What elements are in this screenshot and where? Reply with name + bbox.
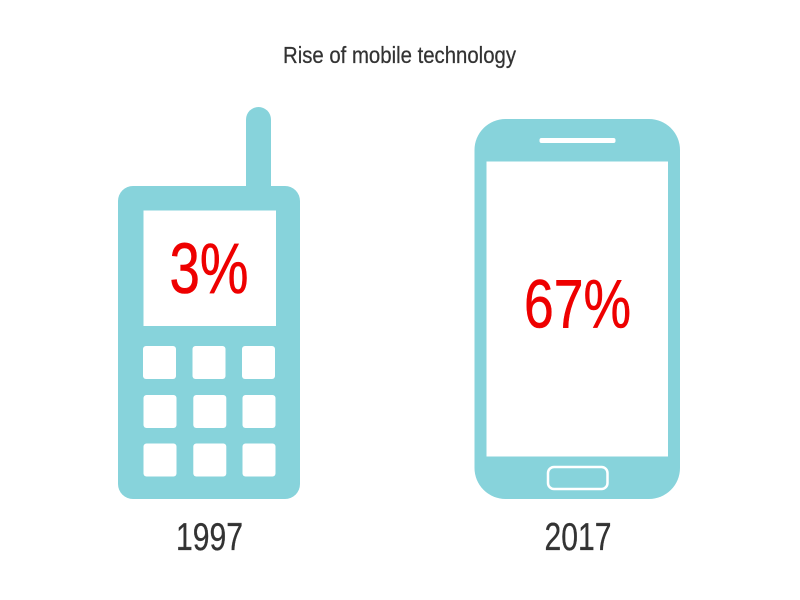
year label: 2017: 2017 [544, 516, 612, 559]
icon: antenna [246, 107, 271, 190]
phone screen [144, 210, 276, 326]
panel: 2017 smartphone [474, 119, 680, 559]
stat: 3%: 3% [170, 230, 248, 309]
year label: 1997: 1997 [176, 516, 243, 559]
keypad [143, 346, 276, 476]
title: Rise of mobile technology [283, 42, 516, 68]
icon: smartphone body [474, 119, 680, 499]
icon: feature phone body [118, 186, 300, 499]
icon: speaker slot [540, 138, 616, 143]
stat: 67%: 67% [524, 266, 631, 342]
panel: 1997 phone [118, 107, 300, 559]
icon: home button [548, 467, 608, 489]
smartphone screen [486, 162, 668, 456]
